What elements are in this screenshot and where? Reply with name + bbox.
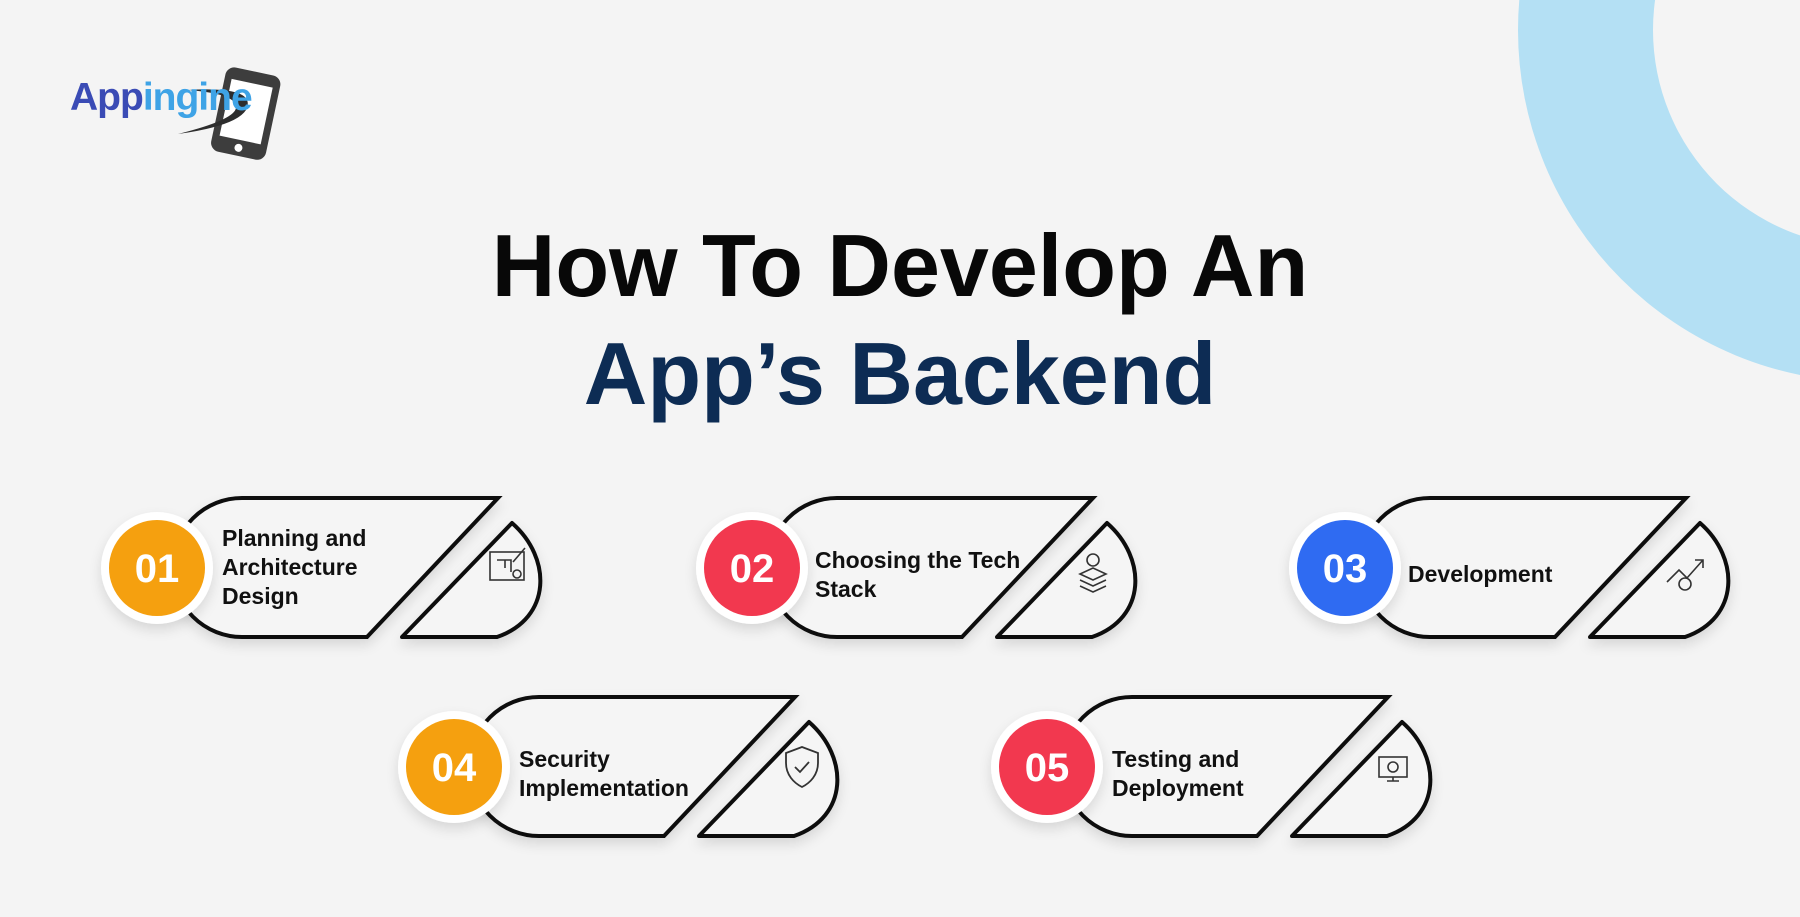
icon: growth (1667, 560, 1703, 590)
step 05 (991, 697, 1430, 836)
step 03: 03 (1323, 547, 1367, 591)
step 02: 02 (730, 547, 774, 591)
title: App’s Backend (584, 324, 1216, 423)
step 04: 04 (432, 746, 477, 790)
step 05: Testing and (1112, 746, 1239, 772)
step 02: Stack (815, 576, 877, 602)
step 02 (696, 498, 1135, 637)
step 01 (101, 498, 540, 637)
step 04: Security (519, 746, 610, 772)
step 05: 05 (1025, 746, 1069, 790)
step 04 (398, 697, 837, 836)
title: How To Develop An (492, 216, 1308, 315)
step 03 (1289, 498, 1728, 637)
icon: blueprint (490, 548, 525, 580)
step 01: Architecture (222, 554, 357, 580)
step 01: Design (222, 583, 299, 609)
icon: phone (209, 66, 282, 161)
step 05: Deployment (1112, 775, 1244, 801)
icon: stack (1080, 554, 1106, 592)
step 02: Choosing the Tech (815, 547, 1020, 573)
title (492, 216, 1308, 423)
icon: shield (786, 747, 818, 787)
icon: deploy (1379, 757, 1407, 781)
step 03: Development (1408, 561, 1553, 587)
step 01: 01 (135, 547, 179, 591)
step 01: Planning and (222, 525, 366, 551)
step 04: Implementation (519, 775, 689, 801)
logo text: Appingine (70, 76, 252, 119)
logo (70, 67, 280, 160)
